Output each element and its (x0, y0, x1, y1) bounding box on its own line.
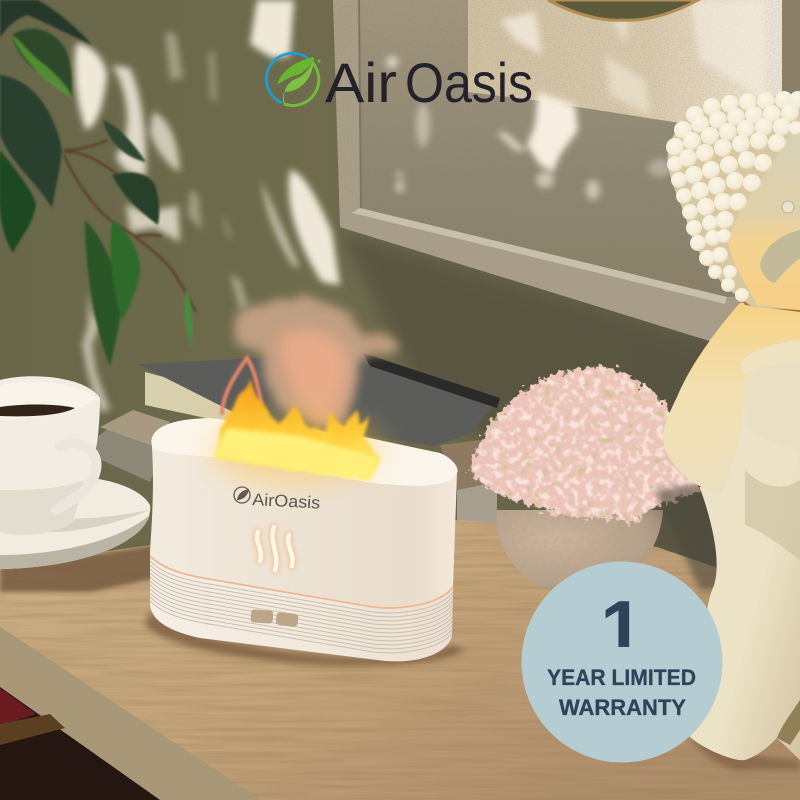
badge line two: WARRANTY (559, 695, 686, 720)
brand logo (266, 51, 533, 114)
statue ear (760, 230, 800, 283)
frame: hanging decor at top (548, 0, 698, 20)
statue face (727, 118, 800, 310)
statue lower robe (690, 360, 800, 760)
device ridged base (150, 557, 453, 661)
books stack (97, 353, 500, 532)
lower book right top (440, 438, 497, 490)
logo icon (266, 53, 320, 106)
badge number: 1 (600, 584, 644, 672)
statue urna (782, 201, 794, 213)
logo upper leaf (277, 57, 314, 85)
table grain (0, 524, 711, 800)
statue sleeve (740, 340, 800, 374)
saucer rim shadow (0, 515, 150, 569)
device logo icon (234, 487, 250, 503)
potted plant (460, 360, 705, 600)
saucer (0, 476, 150, 569)
pot texture (556, 538, 566, 550)
frame: outer wood (333, 0, 800, 342)
frame: burlap texture (333, 0, 800, 345)
shadow on table (145, 610, 465, 666)
table surface (0, 520, 800, 800)
leaves (0, 0, 192, 366)
cup shading (0, 480, 84, 535)
sunlight patches on wall (75, 0, 340, 412)
statue head backing (668, 96, 800, 310)
warranty badge (522, 562, 722, 762)
statue arm (663, 303, 800, 493)
lower book right side (457, 482, 497, 532)
frame: white strip right (770, 0, 782, 120)
leaf stems (64, 140, 196, 312)
flower cluster (470, 366, 700, 522)
statue robe dark folds (745, 470, 800, 560)
cup inner (0, 382, 96, 420)
buddha statue (655, 91, 800, 771)
upper book spine (363, 353, 500, 408)
plant leaves top left (0, 0, 196, 366)
base ridges (150, 561, 453, 653)
flame plate (214, 428, 378, 480)
picture frame (333, 0, 800, 345)
red object under table (0, 688, 36, 726)
glowing vapor icon (257, 527, 293, 570)
pink flame tip (222, 358, 262, 415)
saucer shade (0, 510, 150, 532)
statue belly (743, 362, 800, 450)
table under shadow (0, 687, 160, 800)
flame glow (210, 420, 380, 480)
lower book top (100, 410, 170, 445)
coffee cup and saucer (0, 376, 150, 569)
shelf edge under table (0, 714, 65, 745)
statue neck shadow (742, 300, 800, 312)
frame: moulding front (340, 213, 725, 342)
upper book pages (145, 372, 240, 425)
logo green arc (284, 62, 319, 106)
flame tongues (214, 380, 380, 480)
statue base crack (777, 700, 800, 745)
frame: burlap interior (358, 0, 782, 297)
frame: mat (468, 0, 772, 123)
statue shadow on wall (655, 480, 730, 590)
button right (275, 612, 299, 627)
table shadow under saucer (0, 545, 158, 592)
badge line one: YEAR LIMITED (547, 665, 696, 690)
device logo (234, 487, 321, 513)
logo blue arc (266, 53, 310, 103)
wall shadow under frame (340, 232, 720, 580)
device body (150, 447, 457, 609)
pot (496, 510, 663, 590)
badge circle (522, 562, 722, 762)
logo wordmark: Air (325, 51, 397, 114)
statue curls (666, 91, 800, 302)
table front edge (0, 627, 260, 800)
statue shadow on table (690, 738, 800, 771)
mist and flame (210, 298, 400, 480)
button left (251, 609, 273, 624)
cup body (0, 376, 100, 535)
device logo text: AirOasis (252, 490, 321, 513)
lower book side (97, 410, 170, 482)
upper book cover (138, 353, 500, 446)
frame: burlap strip right (782, 0, 800, 120)
glowing seam (150, 556, 453, 608)
logo dot (318, 60, 320, 62)
frame: lower moulding highlight (352, 208, 727, 304)
logo wordmark: Oasis (405, 51, 533, 114)
frame: sunlit patches (386, 0, 765, 200)
diffuser device (145, 418, 465, 666)
frame: left inner line (358, 0, 362, 208)
flower texture (470, 366, 698, 521)
logo lower leaf (283, 57, 314, 106)
top rim (151, 418, 458, 486)
coffee (0, 404, 75, 416)
mist plume (232, 298, 400, 428)
cup handle (56, 443, 97, 510)
